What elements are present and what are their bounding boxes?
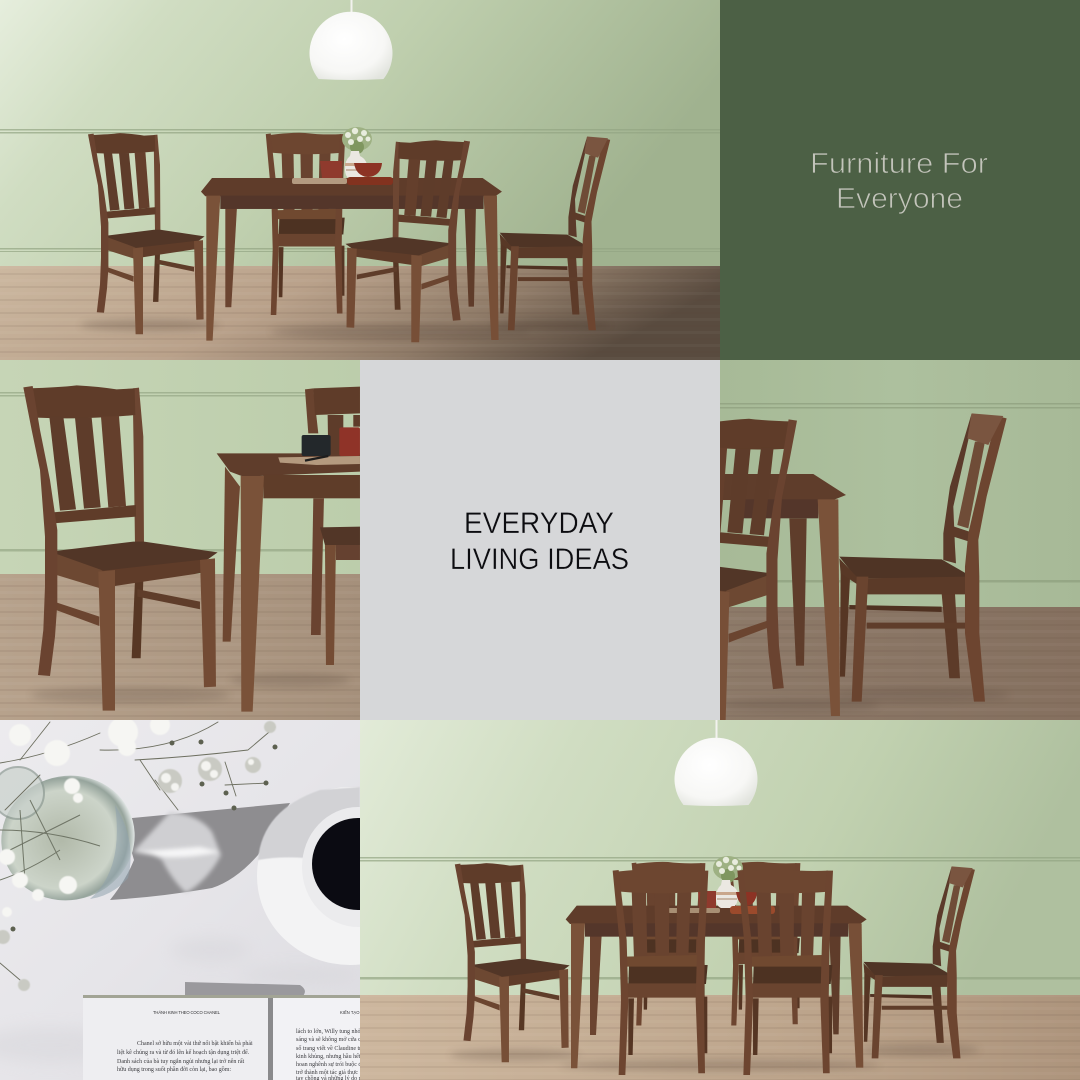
text: Everyone: Everyone: [836, 183, 963, 215]
floor shadows: [30, 673, 350, 703]
vase shadow: [110, 803, 290, 900]
panel: coffee, vase and book photo: [0, 720, 367, 1080]
tablecloth: [0, 720, 360, 1080]
chair: side: [839, 413, 1007, 702]
icon: coffee cup: [302, 807, 414, 927]
text: right page: số trang viết về Claudine tron: [296, 1045, 367, 1052]
floor shadows: [450, 1044, 980, 1071]
wall moulding: [720, 403, 1080, 582]
panel: headline dark green: [720, 0, 1080, 360]
tableware: [668, 856, 775, 914]
text: right page: hoan nghênh sự trói buộc đó: [296, 1062, 364, 1068]
floor: [360, 995, 1080, 1080]
text: right page: [296, 1029, 367, 1080]
chair: large: [23, 385, 218, 711]
table: [720, 474, 846, 716]
tableware: [278, 427, 360, 465]
chair: rear right: [727, 862, 800, 1026]
wall moulding: [0, 392, 360, 552]
bud dots: [10, 740, 278, 932]
wall moulding: [0, 129, 720, 252]
chair: left: [88, 133, 205, 334]
text: left page: Chanel sở hữu một vài thứ nổi bật khiến bà phải: [137, 1040, 253, 1047]
floor: [720, 607, 1080, 720]
table: [201, 178, 502, 341]
chair: cropped left: [622, 419, 797, 721]
rear chair and table: [217, 387, 360, 712]
text: LIVING IDEAS: LIVING IDEAS: [450, 543, 629, 576]
panel: tagline light grey: [360, 360, 720, 720]
icon: pendant lamp: [674, 720, 758, 806]
text: book header left: THÁNH KINH THEO COCO CHANEL: [153, 1010, 221, 1015]
icon: saucer: [257, 787, 443, 965]
table: [217, 453, 360, 712]
wall: [360, 720, 1080, 996]
chair: rear: [305, 387, 360, 665]
text: right page: sáng và sẽ không mở cửa cho: [296, 1037, 367, 1043]
chair: rear: [266, 133, 345, 315]
text: left page: [117, 1040, 253, 1073]
chair: front centre: [345, 140, 470, 342]
icon: glass vase: [0, 761, 149, 915]
text: left page: hữu dụng trong suốt phần đời còn lại, bao gồm:: [117, 1066, 231, 1073]
panel: full dining set photo: [360, 720, 1080, 1080]
chair: right side: [500, 136, 610, 330]
text: left page: liệt kê chúng ra và từ đó lên kế hoạch tận dụng triệt để.: [117, 1049, 250, 1056]
text: right page: trở thành một tác giả thực: [296, 1070, 358, 1076]
text: book header right: KIẾN TẠO: [340, 1010, 360, 1015]
cloth folds: [0, 938, 360, 1063]
wall moulding: [360, 857, 1080, 980]
panel: dining set photo: [0, 0, 720, 360]
chair: left: [455, 863, 570, 1062]
text: EVERYDAY: EVERYDAY: [464, 507, 614, 540]
floor: [0, 574, 360, 720]
chair: front left: [613, 869, 708, 1075]
chair: right side: [863, 866, 975, 1058]
icon: open book: [83, 982, 367, 1080]
baby's breath branches: [0, 722, 275, 980]
tableware: [292, 127, 393, 185]
text: right page: lách to lớn, Willy tung nhỏ: [296, 1029, 360, 1035]
text: right page: kinh khủng, nhưng hầu hết c: [296, 1053, 365, 1060]
panel: table and side chair closeup: [720, 360, 1080, 720]
text: Furniture For: Furniture For: [810, 148, 988, 180]
baby's breath blooms: [0, 715, 276, 991]
light through vase: [133, 812, 221, 893]
text: left page: Danh sách của bà tuy ngắn ngủi nhưng lại trở nên rất: [117, 1058, 245, 1065]
chair: rear left: [632, 862, 705, 1026]
floor shadows: [720, 688, 1010, 712]
chair: front right: [737, 869, 833, 1075]
wall: [0, 360, 360, 575]
floor shadows: [80, 319, 610, 339]
icon: pendant lamp: [310, 0, 392, 80]
table: [566, 906, 867, 1068]
panel: chair and table closeup: [0, 360, 360, 720]
wall: [720, 360, 1080, 608]
floor: [0, 266, 720, 360]
wall: [0, 0, 720, 267]
